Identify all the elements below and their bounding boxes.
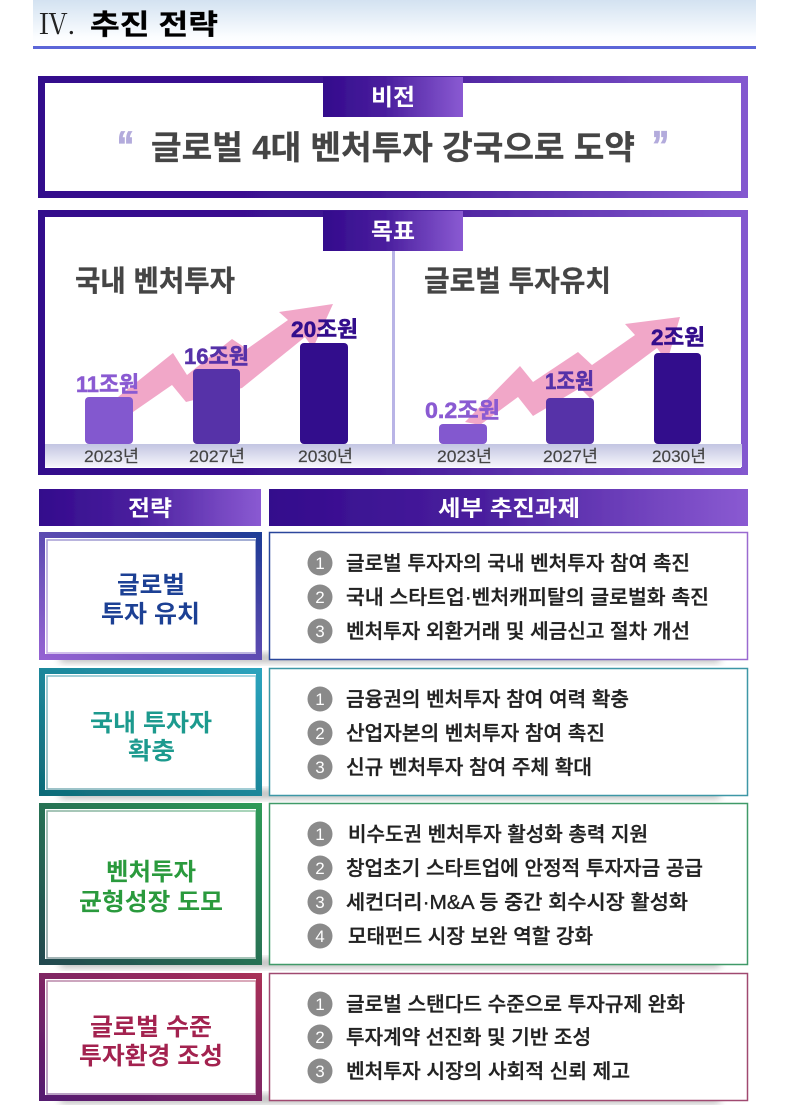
section number: Ⅳ. bbox=[39, 10, 75, 41]
strategy box bbox=[42, 806, 259, 962]
chart: domestic venture investment bbox=[75, 265, 358, 466]
task list: 투자계약 선진화 및 기반 조성 bbox=[346, 1026, 591, 1049]
bar 2030 bbox=[654, 353, 701, 444]
section header bbox=[33, 0, 756, 49]
strategy box bbox=[42, 535, 259, 657]
task list: 글로벌 스탠다드 수준으로 투자규제 완화 bbox=[346, 993, 685, 1016]
task list: 3 bbox=[315, 1062, 325, 1081]
task list: 2 bbox=[315, 1028, 325, 1047]
task list: 벤처투자 시장의 사회적 신뢰 제고 bbox=[346, 1060, 630, 1083]
task list: 2 bbox=[315, 859, 325, 878]
year 2027: 2027년 bbox=[543, 447, 598, 466]
value 1: 1조원 bbox=[545, 369, 594, 394]
task list bbox=[270, 668, 748, 796]
task list: 모태펀드 시장 보완 역할 강화 bbox=[348, 925, 593, 948]
tasks column header: 세부 추진과제 bbox=[438, 496, 580, 521]
task list: 벤처투자 외환거래 및 세금신고 절차 개선 bbox=[346, 620, 690, 643]
value 0.2: 0.2조원 bbox=[425, 398, 500, 423]
task list: 국내 스타트업·벤처캐피탈의 글로벌화 촉진 bbox=[346, 586, 709, 609]
year 2030: 2030년 bbox=[652, 447, 706, 466]
task list: 3 bbox=[315, 758, 325, 777]
vision badge: 비전 bbox=[371, 84, 415, 110]
task list: 1 bbox=[315, 825, 325, 844]
strategy column header bbox=[39, 489, 261, 526]
task list: 1 bbox=[315, 554, 325, 573]
task list: 2 bbox=[315, 724, 325, 743]
task list: 2 bbox=[315, 588, 325, 607]
task list bbox=[270, 974, 748, 1100]
chart: global investment attraction bbox=[424, 265, 706, 466]
bar 2023 bbox=[439, 424, 487, 444]
year 2030: 2030년 bbox=[298, 447, 353, 466]
strategy box: 투자환경 조성 bbox=[79, 1043, 223, 1070]
bar 2030 bbox=[300, 343, 348, 444]
task list: 세컨더리·M&A 등 중간 회수시장 활성화 bbox=[346, 891, 688, 914]
year 2027: 2027년 bbox=[189, 447, 245, 466]
strategy box: 벤처투자 bbox=[106, 859, 196, 886]
value 20: 20조원 bbox=[291, 317, 358, 342]
strategy box: 글로벌 bbox=[117, 572, 185, 599]
section title: 추진 전략 bbox=[90, 9, 218, 40]
strategy box: 균형성장 도모 bbox=[79, 889, 223, 916]
bar 2023 bbox=[85, 397, 133, 444]
task list bbox=[270, 804, 748, 964]
strategy box: 투자 유치 bbox=[101, 601, 200, 628]
panel: vision bbox=[42, 77, 744, 194]
growth arrow bbox=[118, 304, 333, 412]
strategy box bbox=[42, 671, 259, 793]
year 2023: 2023년 bbox=[84, 447, 139, 466]
task list: 1 bbox=[315, 690, 325, 709]
growth arrow bbox=[465, 317, 680, 425]
panel: goals bbox=[42, 211, 744, 472]
opening quote mark: “ bbox=[117, 124, 134, 168]
task list: 산업자본의 벤처투자 참여 촉진 bbox=[346, 722, 605, 745]
value 11: 11조원 bbox=[76, 372, 139, 397]
task list: 4 bbox=[315, 927, 325, 946]
bar 2027 bbox=[193, 369, 240, 444]
task list: 금융권의 벤처투자 참여 여력 확충 bbox=[346, 688, 629, 711]
task list: 3 bbox=[315, 893, 325, 912]
task list: 신규 벤처투자 참여 주체 확대 bbox=[346, 756, 592, 779]
value 2: 2조원 bbox=[651, 325, 705, 350]
task list: 1 bbox=[315, 995, 325, 1014]
goals badge bbox=[323, 211, 463, 251]
task list bbox=[270, 532, 748, 660]
row: global-standard environment bbox=[42, 974, 748, 1103]
row: global investment attraction bbox=[42, 532, 748, 662]
row: domestic investor expansion bbox=[42, 668, 748, 798]
closing quote mark: ” bbox=[652, 124, 669, 168]
row: balanced growth bbox=[42, 804, 748, 967]
strategy box: 확충 bbox=[128, 738, 175, 765]
strategy column header: 전략 bbox=[128, 496, 172, 521]
chart heading: 국내 벤처투자 bbox=[75, 265, 235, 298]
chart heading: 글로벌 투자유치 bbox=[424, 265, 611, 298]
task list: 비수도권 벤처투자 활성화 총력 지원 bbox=[348, 823, 648, 846]
vision statement: 글로벌 4대 벤처투자 강국으로 도약 bbox=[151, 129, 635, 166]
bar 2027 bbox=[546, 398, 594, 444]
goals badge: 목표 bbox=[371, 218, 415, 244]
strategy box bbox=[42, 976, 259, 1098]
strategy box: 글로벌 수준 bbox=[90, 1014, 212, 1041]
tasks column header bbox=[269, 489, 748, 526]
strategy box: 국내 투자자 bbox=[90, 710, 212, 737]
task list: 3 bbox=[315, 622, 325, 641]
year 2023: 2023년 bbox=[437, 447, 492, 466]
vision badge bbox=[323, 77, 463, 117]
value 16: 16조원 bbox=[184, 344, 249, 369]
task list: 창업초기 스타트업에 안정적 투자자금 공급 bbox=[346, 857, 703, 880]
task list: 글로벌 투자자의 국내 벤처투자 참여 촉진 bbox=[346, 552, 690, 575]
